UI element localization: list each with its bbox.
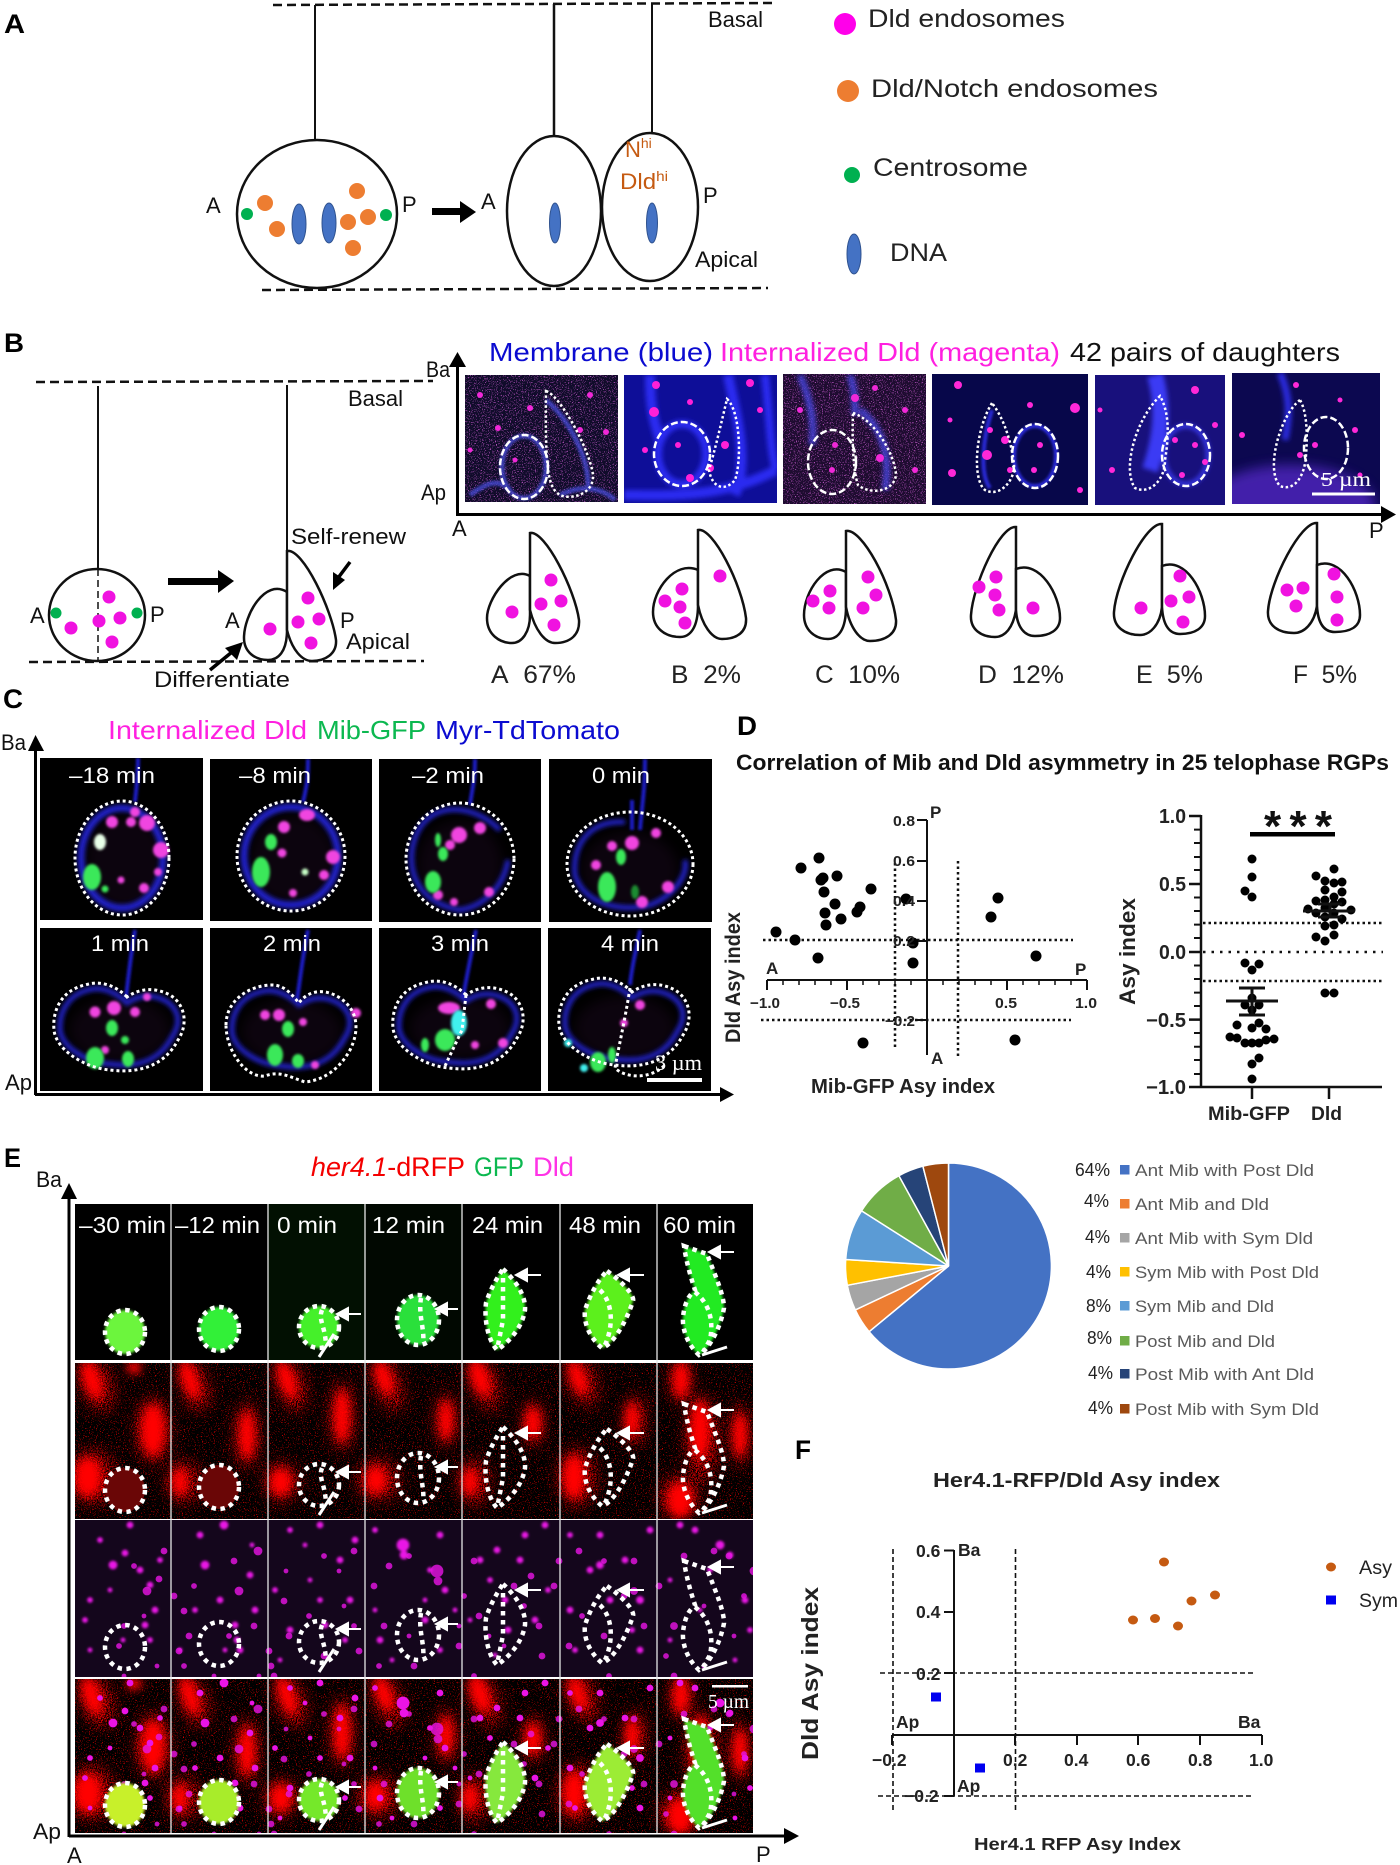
micrograph 5 <box>1095 375 1225 505</box>
label: Basal: Basal <box>348 386 403 411</box>
legend row: 4% Post Mib with Sym Dld <box>1088 1398 1319 1419</box>
label: Dldhi: Dld <box>620 169 653 194</box>
frame: 4 min <box>548 928 711 1091</box>
frame: -18 min <box>40 758 203 920</box>
title: pair count: 42 pairs of daughters <box>1070 337 1340 367</box>
schematic: daughter cells <box>244 385 336 661</box>
title: GFP: GFP <box>474 1152 524 1182</box>
percentage C: C 10% <box>815 661 900 689</box>
daughter cell: posterior <box>602 4 698 281</box>
row 3: Dld <box>75 1520 753 1677</box>
scatter plot: Mib vs Dld: A <box>766 959 778 978</box>
category label: Mib-GFP: Mib-GFP <box>1208 1104 1290 1125</box>
scatter plot: Ba <box>1238 1712 1261 1732</box>
percentage D: D 12% <box>978 661 1064 689</box>
frame: 4 min: 3 µm <box>655 1050 702 1075</box>
scatter plot: Mib vs Dld: −1.0 <box>750 995 780 1012</box>
row 1: GFP: 48 min <box>569 1212 641 1238</box>
title: Mib-GFP: Mib-GFP <box>317 715 426 745</box>
label: Nhi: N <box>625 137 641 162</box>
percentage B: B 2% <box>671 661 741 689</box>
label: A: A <box>30 603 45 628</box>
legend: endosomes, centrosome and DNA: DNA <box>890 239 947 267</box>
arrow: division <box>168 570 234 593</box>
legend row: 64% Ant Mib with Post Dld: Ant Mib with Post Dld <box>1135 1161 1314 1180</box>
scatter plot: 0.2 <box>1003 1750 1028 1770</box>
row 1: GFP: –12 min <box>175 1212 260 1238</box>
title: Dld: Dld <box>533 1152 574 1182</box>
axis label: Ap: Ap <box>5 1070 32 1095</box>
pattern diagram A <box>487 533 579 643</box>
legend row: 4% Ant Mib and Dld <box>1084 1191 1269 1214</box>
legend row: 8% Post Mib and Dld: 8% <box>1087 1328 1112 1348</box>
daughter cell: anterior <box>507 4 601 286</box>
legend row: 64% Ant Mib with Post Dld: 64% <box>1075 1160 1110 1180</box>
legend: endosomes, centrosome and DNA: Centrosome <box>873 154 1028 182</box>
scatter plot: Mib vs Dld: 0.2 <box>893 933 915 950</box>
legend row: 8% Sym Mib and Dld <box>1086 1296 1274 1316</box>
micrograph 4 <box>932 374 1088 505</box>
label: P: P <box>402 192 417 217</box>
row 1: GFP: 12 min <box>372 1212 445 1238</box>
heading: D: D <box>737 711 757 741</box>
legend: Asy and Sym: Asy <box>1359 1558 1393 1579</box>
panel: pie chart of Mib and Dld classes <box>845 1160 1319 1419</box>
axis: basal-apical and anterior-posterior <box>449 352 1396 523</box>
label: Apical: Apical <box>346 629 410 654</box>
scatter plot: Mib vs Dld: 0.8 <box>893 813 915 830</box>
scatter plot: Mib vs Dld: −0.2 <box>885 1013 915 1030</box>
panel D: correlation charts <box>722 711 1389 1125</box>
legend row: 4% Sym Mib with Post Dld <box>1086 1262 1319 1282</box>
arrow: differentiate <box>210 642 243 670</box>
panel F: Her4.1-RFP vs Dld scatter <box>795 1435 1398 1854</box>
dot plot: Asy index: −0.5 <box>1146 1010 1186 1032</box>
row 2: her4.1-dRFP <box>75 1363 753 1519</box>
y-axis title: Asy index: Asy index <box>1115 897 1140 1005</box>
scatter plot: Mib vs Dld: 0.6 <box>893 853 915 870</box>
frame: -2 min: –2 min <box>412 763 484 788</box>
frame: 2 min: 2 min <box>263 931 321 956</box>
legend: Asy and Sym <box>1326 1558 1398 1612</box>
axis label: Ap: Ap <box>33 1819 61 1844</box>
legend row: 4% Sym Mib with Post Dld: Sym Mib with Post Dld <box>1135 1263 1319 1282</box>
x-axis title: Her4.1 RFP Asy Index: Her4.1 RFP Asy Index <box>974 1834 1181 1854</box>
pattern diagram F <box>1268 523 1360 633</box>
legend row: 4% Sym Mib with Post Dld: 4% <box>1086 1262 1111 1282</box>
title: her4.1-dRFP: her4.1-dRFP <box>311 1152 465 1182</box>
heading: C: C <box>3 684 23 714</box>
legend row: 8% Sym Mib and Dld: Sym Mib and Dld <box>1135 1297 1274 1316</box>
title: Her4.1-RFP/Dld Asy index: Her4.1-RFP/Dld Asy index <box>933 1470 1220 1492</box>
scatter plot: Ap <box>896 1712 919 1732</box>
legend row: 4% Ant Mib with Sym Dld: Ant Mib with Sym Dld <box>1135 1229 1313 1248</box>
legend row: 8% Post Mib and Dld: Post Mib and Dld <box>1135 1332 1275 1351</box>
dot plot: Asy index: 1.0 <box>1159 806 1186 828</box>
label: Dldhi: hi <box>656 168 668 184</box>
micrograph 1 <box>465 375 618 502</box>
grid lines <box>171 1204 657 1833</box>
category label: Dld: Dld <box>1311 1104 1342 1125</box>
label: A daughter: A <box>225 608 240 633</box>
percentage F: F 5% <box>1293 661 1357 689</box>
row 1: GFP: 0 min <box>277 1212 337 1238</box>
arrow: self-renew <box>333 562 350 590</box>
row 1: GFP <box>75 1204 753 1360</box>
dot plot: Asy index: 0.0 <box>1159 942 1186 964</box>
axis label: A: A <box>452 516 467 541</box>
legend row: 4% Ant Mib and Dld: Ant Mib and Dld <box>1135 1195 1269 1214</box>
schematic: dividing cell <box>29 381 433 662</box>
scatter plot: −0.2 <box>872 1750 907 1770</box>
scatter plot: 0.6 <box>1126 1750 1151 1770</box>
scatter plot: 1.0 <box>1249 1750 1274 1770</box>
legend row: 4% Post Mib with Sym Dld: Post Mib with Sym Dld <box>1135 1400 1319 1419</box>
frame: 1 min: 1 min <box>91 931 149 956</box>
frame: -2 min <box>379 759 541 922</box>
scatter plot <box>872 1540 1274 1811</box>
panel A: cell division schematic <box>4 3 1158 290</box>
legend: Asy and Sym: Sym <box>1359 1591 1398 1612</box>
basal boundary dashed line <box>273 3 777 5</box>
legend row: 4% Ant Mib with Sym Dld: 4% <box>1085 1227 1110 1247</box>
legend: endosomes, centrosome and DNA: Dld/Notch endosomes <box>871 75 1158 103</box>
legend row: 4% Ant Mib with Sym Dld <box>1085 1227 1313 1248</box>
scatter plot: Mib vs Dld: P <box>1075 960 1086 979</box>
row 1: GFP: 60 min <box>663 1212 736 1238</box>
axis label: P: P <box>1369 518 1384 543</box>
legend row: 4% Post Mib with Ant Dld <box>1088 1363 1314 1384</box>
dot plot: Asy index <box>1146 802 1383 1099</box>
axis label: Ba: Ba <box>36 1167 63 1192</box>
heading: B: B <box>4 328 24 358</box>
frame: 3 min: 3 min <box>431 931 489 956</box>
heading: F: F <box>795 1435 811 1465</box>
label: P: P <box>150 602 165 627</box>
scatter plot: 0.6 <box>916 1541 941 1561</box>
percentage E: E 5% <box>1136 661 1203 689</box>
scatter plot: 0.2 <box>916 1664 941 1684</box>
legend row: 4% Post Mib with Sym Dld: 4% <box>1088 1398 1113 1418</box>
dot plot: Asy index: *** <box>1264 802 1333 851</box>
percentage A: A 67% <box>491 661 576 689</box>
pattern diagram C <box>804 531 896 641</box>
title: Myr-TdTomato: Myr-TdTomato <box>435 715 620 745</box>
frame: -8 min: –8 min <box>239 763 311 788</box>
title: internalized Dld: Internalized Dld (magenta) <box>720 337 1060 367</box>
axis label: Ap: Ap <box>421 480 446 505</box>
label: Nhi: hi <box>641 135 652 151</box>
label: Basal: Basal <box>708 7 763 32</box>
pie chart <box>845 1163 1051 1369</box>
legend: endosomes, centrosome and DNA: Dld endosomes <box>868 5 1065 33</box>
row 1: GFP: –30 min <box>79 1212 166 1238</box>
scatter plot: Mib vs Dld: 0.4 <box>893 893 916 910</box>
panel B: Dld inheritance <box>4 328 1396 692</box>
frame: -18 min: –18 min <box>69 763 155 788</box>
label: Apical: Apical <box>695 247 758 272</box>
title: correlation: Correlation of Mib and Dld asymmetry in 25 telophase RGPs <box>736 750 1389 775</box>
label: second A: A <box>481 189 496 214</box>
heading: A: A <box>4 9 25 39</box>
legend row: 4% Post Mib with Ant Dld: 4% <box>1088 1363 1113 1383</box>
scatter plot: Mib vs Dld <box>750 803 1097 1068</box>
frame: 0 min: 0 min <box>592 763 650 788</box>
scatter plot: 0.8 <box>1188 1750 1213 1770</box>
row 4: merged: 5 µm <box>708 1691 749 1713</box>
frame: 2 min <box>210 928 372 1091</box>
frame: 4 min: 4 min <box>601 931 659 956</box>
title: internalized Dld: Internalized Dld <box>108 715 307 745</box>
micrograph 6: 5 µm <box>1321 469 1372 491</box>
scatter plot: Ap <box>957 1776 980 1796</box>
axes <box>28 735 734 1102</box>
frame: -8 min <box>210 759 372 921</box>
row 1: GFP: 24 min <box>472 1212 543 1238</box>
legend row: 8% Post Mib and Dld <box>1087 1328 1275 1351</box>
row 4: merged <box>75 1679 753 1833</box>
heading: E: E <box>4 1143 21 1173</box>
label: P daughter: P <box>340 608 355 633</box>
label: A: A <box>206 193 221 218</box>
dot plot: Asy index: −1.0 <box>1146 1077 1186 1099</box>
legend: endosomes, centrosome and DNA <box>834 5 1158 274</box>
y-axis title: Dld Asy index: Dld Asy index <box>797 1587 823 1760</box>
title: channels and pairs: Membrane (blue) <box>489 337 713 367</box>
scatter plot: Mib vs Dld: P <box>930 803 941 822</box>
micrograph 2 <box>624 375 777 503</box>
legend row: 4% Ant Mib and Dld: 4% <box>1084 1191 1109 1211</box>
frame: 0 min <box>549 759 712 922</box>
y-axis title: Dld Asy index: Dld Asy index <box>722 912 745 1043</box>
legend row: 8% Sym Mib and Dld: 8% <box>1086 1296 1111 1316</box>
axes <box>61 1183 799 1844</box>
scatter plot: Mib vs Dld: −0.5 <box>830 995 860 1012</box>
scatter plot: 0.4 <box>916 1602 941 1622</box>
scatter plot: 0.4 <box>1064 1750 1089 1770</box>
frame: 3 min <box>379 928 541 1091</box>
axis label: Ba: Ba <box>426 357 451 382</box>
frame: 1 min <box>40 928 203 1091</box>
panel E: time-lapse grid <box>4 1143 799 1865</box>
pattern diagram E <box>1114 524 1205 635</box>
scatter plot: Mib vs Dld: 0.5 <box>995 995 1017 1012</box>
micrograph 6 <box>1232 373 1380 504</box>
panel C: live imaging time series <box>1 684 734 1102</box>
scatter plot: −0.2 <box>904 1786 939 1806</box>
arrow: division <box>432 201 476 223</box>
label: Self-renew: Self-renew <box>291 524 406 549</box>
x-axis title: Mib-GFP Asy index: Mib-GFP Asy index <box>811 1076 995 1098</box>
pattern diagram D <box>971 527 1060 637</box>
label: third P: P <box>703 183 718 208</box>
scatter plot: Mib vs Dld: A <box>931 1049 943 1068</box>
pattern diagram B <box>653 530 746 639</box>
micrograph 3 <box>783 374 926 504</box>
label: Differentiate: Differentiate <box>154 667 290 692</box>
apical boundary dashed line <box>262 288 768 290</box>
dot plot: Asy index: 0.5 <box>1159 874 1186 896</box>
scatter plot: Mib vs Dld: 1.0 <box>1075 995 1097 1012</box>
legend row: 64% Ant Mib with Post Dld <box>1075 1160 1314 1180</box>
axis label: Ba: Ba <box>1 730 27 755</box>
legend row: 4% Post Mib with Ant Dld: Post Mib with Ant Dld <box>1135 1365 1314 1384</box>
mother cell <box>237 5 397 288</box>
scatter plot: Ba <box>958 1540 981 1560</box>
